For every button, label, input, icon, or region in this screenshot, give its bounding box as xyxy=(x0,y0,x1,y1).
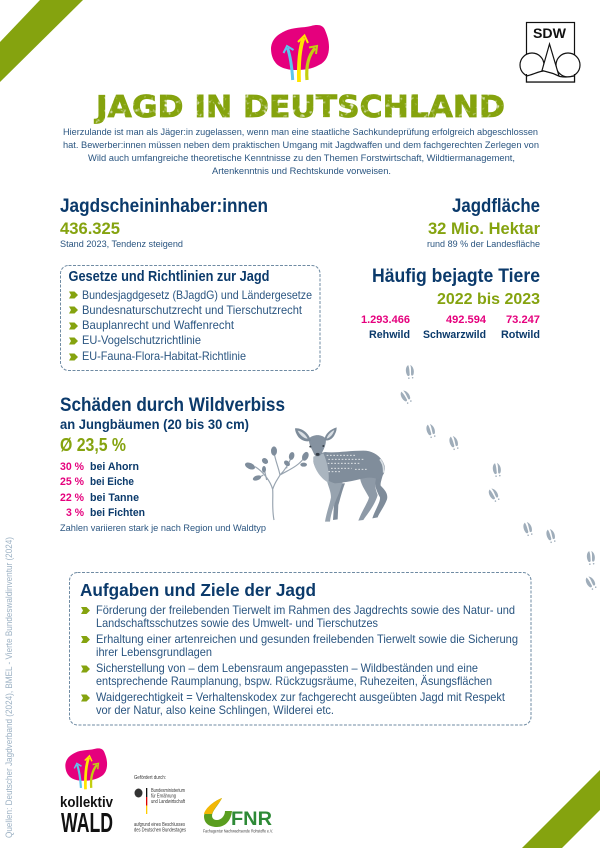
panel: Schäden durch Wildverbiss: an Jungbäumen (20 bis 30 cm) xyxy=(60,417,249,432)
panel: Häufig bejagte Tiere: 73.247 xyxy=(506,314,540,326)
logo: Bundesministerium: für Ernährung xyxy=(151,794,176,800)
list of laws: Bauplanrecht und Waffenrecht xyxy=(82,319,235,332)
panel: Gesetze und Richtlinien xyxy=(60,266,320,370)
logo: SDW xyxy=(520,22,580,82)
intro text: Hierzulande ist man als Jäger:in zugelassen, wenn man eine staatliche Sachkundeprüfung erfolgreich abgeschlossen xyxy=(63,127,538,137)
panel: Häufig bejagte Tiere: Schwarzwild xyxy=(423,329,486,341)
list of goals: Erhaltung einer artenreichen und gesunden freilebenden Tierwelt sowie die Sicherung xyxy=(96,632,518,646)
panel: Schäden durch Wildverbiss xyxy=(60,394,285,534)
panel: Häufig bejagte Tiere: 2022 bis 2023 xyxy=(437,291,540,308)
logo: FNR: Fachagentur Nachwachsende Rohstoffe e.V. xyxy=(203,828,273,834)
list of laws: Bundesjagdgesetz (BJagdG) und Ländergesetze xyxy=(82,289,312,302)
panel: Häufig bejagte Tiere: 492.594 xyxy=(446,314,486,326)
intro text xyxy=(63,127,539,176)
panel: Aufgaben und Ziele der Jagd xyxy=(70,572,531,725)
logo: Kollektiv Wald footer: WALD xyxy=(61,807,113,838)
logo: Bundesministerium: Bundesministerium xyxy=(151,788,185,794)
icon: sapling xyxy=(244,446,310,520)
logo: Bundesministerium: Gefördert durch: xyxy=(134,775,166,781)
decorative corner stripe: top left xyxy=(0,0,83,82)
list of goals xyxy=(81,603,518,717)
list of goals: Landschaftsschutzes sowie des Umwelt- und Tierschutzes xyxy=(96,616,378,630)
white spots xyxy=(327,455,368,472)
stat: Jagdfläche: rund 89 % der Landesfläche xyxy=(427,239,540,250)
panel: Schäden durch Wildverbiss: Schäden durch Wildverbiss xyxy=(60,394,285,416)
far legs xyxy=(372,467,387,518)
panel: Häufig bejagte Tiere: Häufig bejagte Tiere xyxy=(372,266,540,287)
list of laws: EU-Fauna-Flora-Habitat-Richtlinie xyxy=(82,350,246,363)
list of goals: ihrer Lebensgrundlagen xyxy=(96,645,212,659)
list of laws: Bundesnaturschutzrecht und Tierschutzrecht xyxy=(82,304,303,317)
logo: Kollektiv Wald footer xyxy=(60,748,114,838)
stat: Jagdscheininhaber: Jagdscheininhaber:innen xyxy=(60,196,268,217)
logo: Kollektiv Wald tree xyxy=(271,25,329,82)
logo: Bundesministerium: aufgrund eines Beschlusses xyxy=(134,822,185,828)
stat: Jagdfläche xyxy=(427,196,540,250)
panel: Schäden durch Wildverbiss: bei Fichten xyxy=(90,507,145,519)
list of goals: Förderung der freilebenden Tierwelt im Rahmen des Jagdrechts sowie des Natur- und xyxy=(96,603,515,617)
panel: Schäden durch Wildverbiss: 25 % xyxy=(60,476,84,488)
near legs xyxy=(358,477,378,521)
head xyxy=(309,435,326,456)
panel: Schäden durch Wildverbiss: 30 % xyxy=(60,461,84,473)
illustration: deer xyxy=(295,427,387,522)
logo: Bundesministerium xyxy=(134,775,186,834)
panel: Schäden durch Wildverbiss: 22 % xyxy=(60,492,84,504)
panel heading: Aufgaben und Ziele der Jagd xyxy=(80,580,316,600)
list of goals: Waidgerechtigkeit = Verhaltenskodex zur fachgerecht ausgeübten Jagd mit Respekt xyxy=(96,690,506,704)
panel: Schäden durch Wildverbiss: bei Ahorn xyxy=(90,461,139,473)
panel: Häufig bejagte Tiere: Rotwild xyxy=(501,329,540,341)
stat: Jagdscheininhaber: 436.325 xyxy=(60,219,120,238)
body xyxy=(313,451,385,483)
logo: Bundesministerium: und Landwirtschaft xyxy=(151,799,185,805)
panel: Schäden durch Wildverbiss: Zahlen variieren stark je nach Region und Waldtyp xyxy=(60,523,266,534)
logo: FNR: FNR xyxy=(231,809,272,830)
panel: Schäden durch Wildverbiss: bei Eiche xyxy=(90,476,134,488)
panel: Schäden durch Wildverbiss: bei Tanne xyxy=(90,492,139,504)
logo: SDW: SDW xyxy=(533,25,567,41)
list of goals: Sicherstellung von – dem Lebensraum angepassten – Wildbeständen und eine xyxy=(96,661,478,675)
list of goals: entsprechende Raumplanung, bspw. Rückzugsräume, Ruhezeiten, Äsungsflächen xyxy=(96,674,492,688)
decorative corner stripe: bottom right xyxy=(522,770,600,848)
stat: Jagdscheininhaber: Stand 2023, Tendenz steigend xyxy=(60,239,183,250)
intro text: Wild auch umfangreiche theoretische Kenntnisse zu den Themen Forstwirtschaft, Wildtiermanagement, xyxy=(88,153,515,163)
panel: Häufig bejagte Tiere xyxy=(361,266,540,341)
panel: Schäden durch Wildverbiss: 3 % xyxy=(66,507,84,519)
list of laws xyxy=(69,289,312,363)
stat: Jagdfläche: 32 Mio. Hektar xyxy=(428,219,540,238)
panel: Häufig bejagte Tiere: Rehwild xyxy=(369,329,410,341)
list of goals: vor der Natur, also keine Schlingen, Wilderei etc. xyxy=(96,703,334,717)
source note: Quellen: Deutscher Jagdverband (2024), BMEL - Vierte Bundeswaldinventur (2024) xyxy=(4,537,14,838)
stat: Jagdscheininhaber xyxy=(60,196,268,250)
stat: Jagdfläche: Jagdfläche xyxy=(452,196,540,217)
intro text: hat. Bewerber:innen müssen neben dem praktischen Umgang mit Jagdwaffen und dem fachgerechten Zerlegen von xyxy=(63,140,539,150)
title: JAGD IN DEUTSCHLAND xyxy=(94,90,505,125)
logo: FNR xyxy=(203,798,273,834)
icon: animal tracks xyxy=(399,365,598,591)
panel: Häufig bejagte Tiere: 1.293.466 xyxy=(361,314,410,326)
logo: Bundesministerium: des Deutschen Bundestages xyxy=(134,828,186,834)
list of laws: EU-Vogelschutzrichtlinie xyxy=(82,334,201,347)
facial details xyxy=(316,453,320,456)
intro text: Artenkenntnis und Rechtskunde vorweisen. xyxy=(212,166,391,176)
panel heading: Gesetze und Richtlinien zur Jagd xyxy=(68,269,270,285)
panel: Schäden durch Wildverbiss: Ø 23,5 % xyxy=(60,435,126,455)
logo: Kollektiv Wald footer: kollektiv xyxy=(60,794,114,811)
ears xyxy=(295,428,311,441)
